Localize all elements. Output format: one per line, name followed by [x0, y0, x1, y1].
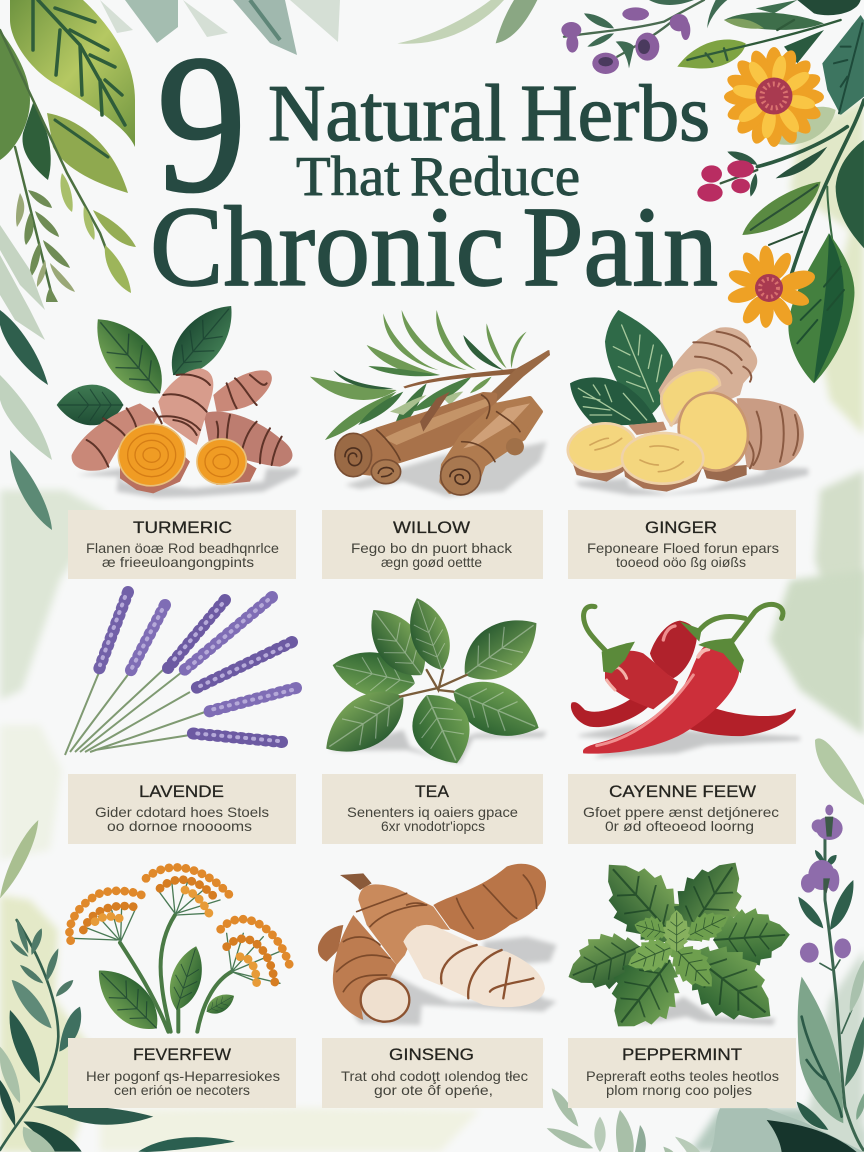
label card: peppermint [568, 1038, 796, 1108]
panel: peppermint [558, 843, 796, 1108]
flower: small orange [726, 245, 817, 328]
illustration: turmeric [57, 293, 300, 498]
label card: ginger: tooeod oöo ßg oiøßs [616, 554, 746, 570]
pale leaf behind flower [774, 107, 836, 145]
illustration: feverfew [69, 867, 290, 1042]
label card: peppermint: Pepreraft eoths teoles heotlos [586, 1068, 779, 1084]
label card: cayenne: CAYENNE FEEW [609, 782, 756, 801]
label card: lavender: Gider cdotard hoes Stoels [95, 804, 269, 820]
label card: lavender [68, 774, 296, 844]
bottom left foliage [0, 820, 235, 1152]
illustration: ginger [565, 310, 808, 495]
label card: cayenne [568, 774, 796, 844]
green leaves top [677, 0, 864, 115]
title numeral 9: 9 [157, 14, 246, 233]
label card: ginger [568, 510, 796, 579]
illustration: ginseng root [318, 864, 557, 1025]
bottom centre and right foliage [547, 805, 864, 1152]
label card: tea: Senenters iq oaiers gpace [347, 804, 518, 820]
title line: Chronic Pain: Chronic Pain [150, 183, 718, 310]
left side foliage [0, 225, 52, 530]
label card: tea: TEA [415, 782, 450, 801]
label card: feverfew [68, 1038, 296, 1108]
label card: willow: ægn goød oettte [381, 554, 482, 570]
illustration: cayenne peppers [571, 604, 800, 758]
panel: turmeric [57, 293, 300, 579]
label card: tea: 6xr vnodotr'iopcs [381, 818, 485, 834]
side leaves [742, 182, 821, 235]
panel: willow [310, 310, 550, 579]
top fade leaves [397, 0, 504, 44]
label card: turmeric [68, 510, 296, 579]
label card: lavender: LAVENDE [139, 782, 224, 801]
label card: feverfew: FEVERFEW [133, 1045, 231, 1064]
label card: willow [322, 510, 543, 579]
illustration: peppermint leaves [558, 843, 792, 1047]
label card: peppermint: PEPPERMINT [622, 1045, 742, 1064]
label card: cayenne: 0r ød ofteoeod lооrng [605, 818, 754, 834]
illustration: lavender [65, 592, 296, 755]
panel: tea [312, 592, 551, 844]
label card: cayenne: Gfoet ppere ænst detjónerec [583, 804, 779, 820]
title line: That Reduce: That Reduce [296, 146, 580, 208]
label card: turmeric: Flanen öoæ Rod beadhqnrlce [86, 540, 279, 556]
panel: feverfew [68, 867, 296, 1108]
illustration: tea leaves [312, 592, 551, 775]
purple sprig [561, 0, 727, 74]
label card: feverfew: cen erión oe necoters [114, 1082, 250, 1098]
label card: peppermint: plom rnorıg coo poljes [606, 1082, 752, 1098]
corner foliage top right with flowers [397, 0, 864, 383]
label card: ginger: GINGER [645, 518, 717, 537]
panel: cayenne [568, 604, 800, 844]
label card: turmeric: æ frieeuloangongpints [102, 554, 254, 570]
label card: willow: WILLOW [393, 518, 470, 537]
label card: ginseng: GINSENG [389, 1045, 474, 1064]
illustration: willow bark [310, 310, 550, 497]
corner foliage top left [0, 0, 340, 302]
label card: turmeric: TURMERIC [133, 518, 232, 537]
magenta buds [697, 151, 757, 202]
label card: ginseng: gor ote ôf opeńe, [374, 1082, 493, 1098]
panel: ginger [565, 310, 808, 579]
flower: large orange [724, 47, 824, 147]
label card: ginseng: Trat ohd codoţt ıolendog tłec [341, 1068, 528, 1084]
label card: willow: Fego bo dn puort bhack [351, 540, 513, 556]
title [150, 14, 718, 310]
label card: feverfew: Her pogonf qs-Heparresiokes [86, 1068, 280, 1084]
label card: tea [322, 774, 543, 844]
panel: lavender [65, 592, 296, 844]
label card: ginger: Feponeare Floed forun epars [587, 540, 779, 556]
title line: Natural Herbs: Natural Herbs [268, 70, 710, 158]
label card: lavender: oo dornoe rnooooms [107, 818, 252, 834]
label card: ginseng [322, 1038, 543, 1108]
panel: ginseng [318, 864, 557, 1108]
